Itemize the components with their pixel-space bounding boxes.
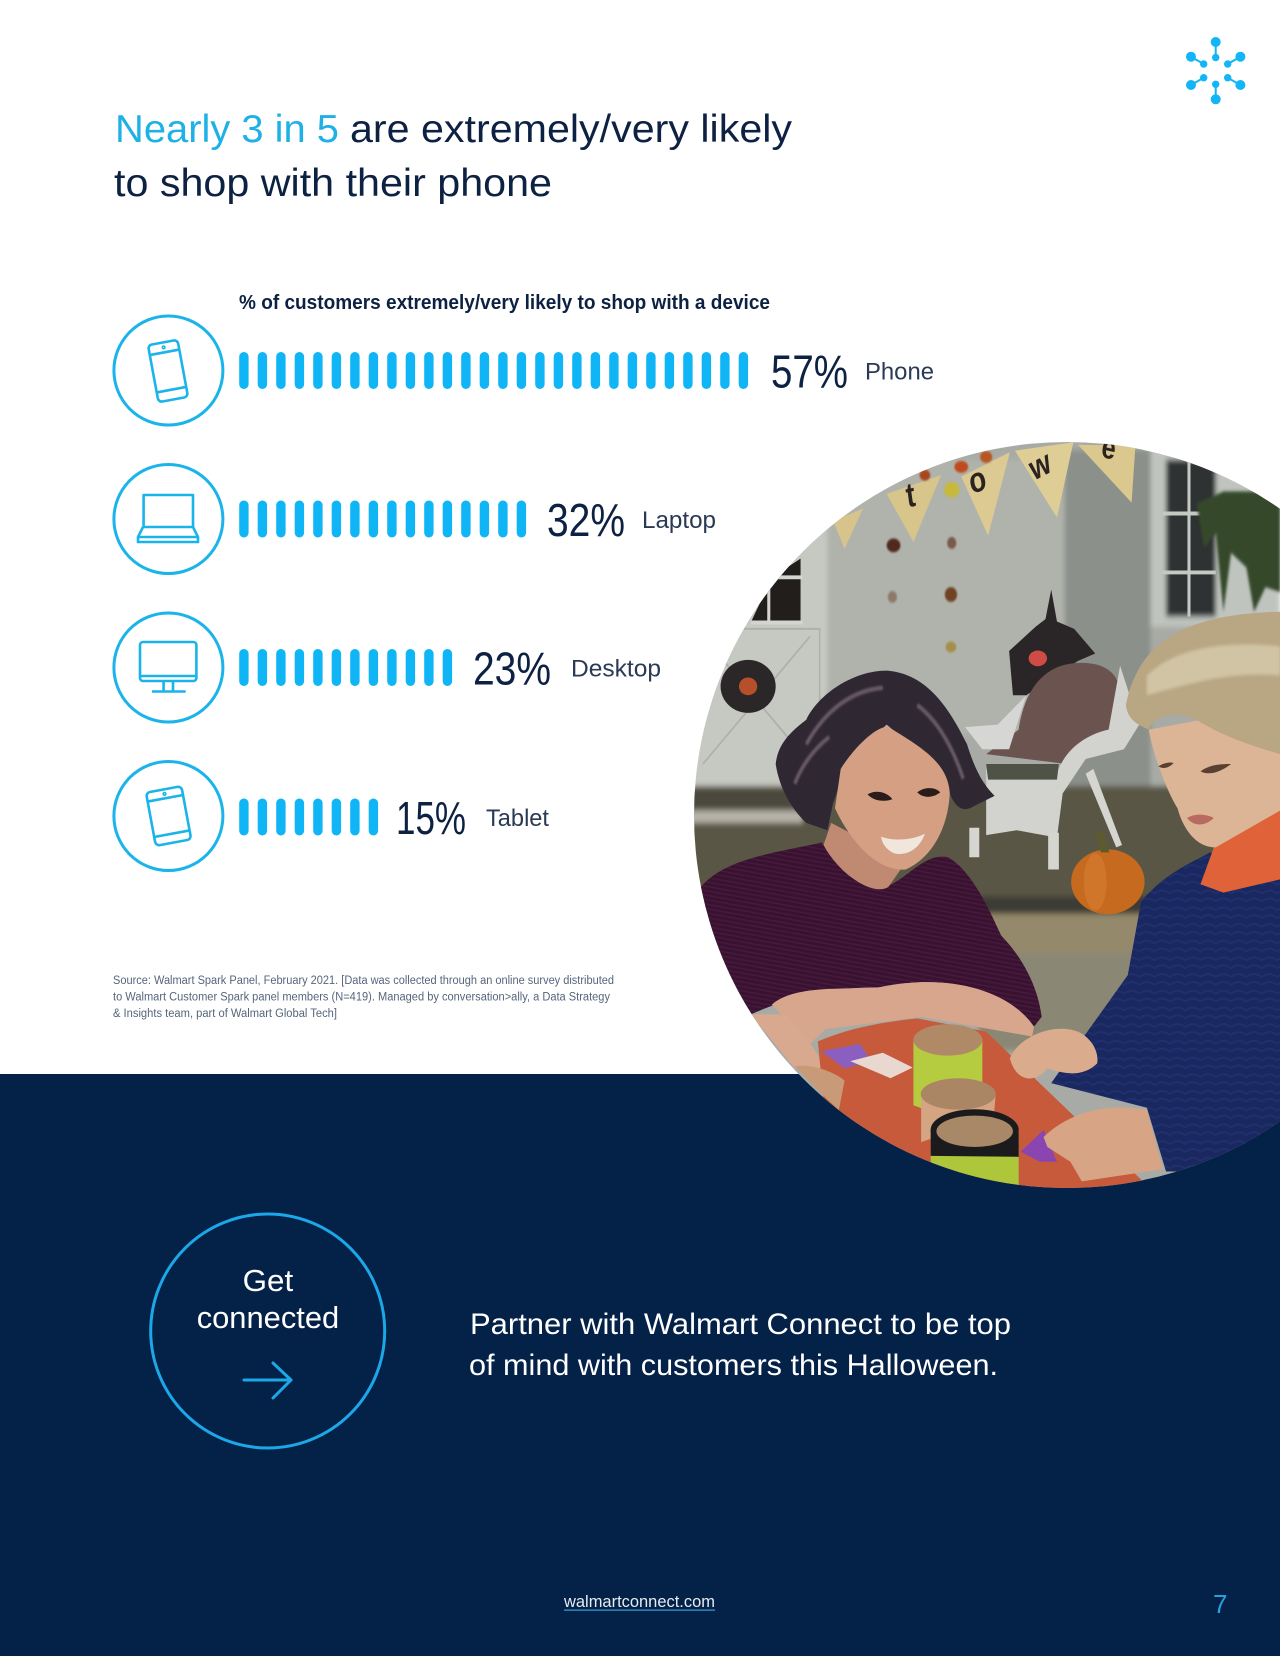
title bbox=[114, 108, 793, 205]
bunting: w bbox=[1024, 442, 1056, 489]
face bbox=[835, 727, 950, 870]
hair bbox=[776, 671, 995, 830]
door wreath bbox=[721, 660, 776, 713]
button text: connected bbox=[197, 1300, 339, 1335]
hair highlights bbox=[795, 688, 963, 784]
panel: device bar chart bbox=[114, 316, 934, 870]
title: to shop with their phone bbox=[114, 162, 552, 205]
face bbox=[1148, 720, 1280, 848]
bunting bbox=[834, 442, 1136, 548]
bar: 15% bbox=[244, 803, 373, 831]
forearm and hand bbox=[772, 982, 1034, 1044]
other hand bbox=[751, 1014, 825, 1068]
source note: Source: Walmart Spark Panel, February 2021. [Data was collected through an online survey distributed bbox=[113, 975, 614, 987]
title: are extremely/very likely bbox=[350, 108, 793, 151]
woman bbox=[701, 671, 1042, 1068]
bar: 32% bbox=[244, 505, 521, 533]
photo: mother and son doing Halloween crafts on a porch bbox=[680, 429, 1280, 1200]
right window frame bbox=[1162, 459, 1216, 617]
button text: Get bbox=[243, 1263, 294, 1298]
value: 32%: 32% bbox=[547, 494, 625, 546]
source note: to Walmart Customer Spark panel members (N=419). Managed by conversation>ally, a Data Strategy bbox=[113, 992, 610, 1004]
smile bbox=[881, 834, 925, 854]
button text bbox=[197, 1263, 339, 1335]
boy bbox=[1010, 612, 1280, 1181]
stencil sheets bbox=[822, 1044, 1057, 1162]
icon: desktop bbox=[114, 613, 223, 722]
turtleneck bbox=[1200, 808, 1280, 893]
row: desktop bbox=[114, 613, 661, 722]
icon: tablet bbox=[114, 762, 223, 870]
source note: & Insights team, part of Walmart Global Tech] bbox=[113, 1008, 337, 1020]
eyes bbox=[868, 788, 940, 801]
label: Laptop: Laptop bbox=[642, 507, 716, 534]
mouth bbox=[1187, 815, 1214, 824]
icon: Walmart Connect logo bbox=[1186, 37, 1245, 104]
hair bbox=[1126, 612, 1280, 754]
bunting: t bbox=[903, 475, 918, 515]
source note bbox=[113, 975, 614, 1020]
chart heading: % of customers extremely/very likely to shop with a device bbox=[239, 292, 770, 314]
lantern bbox=[1009, 590, 1095, 695]
page number: 7 bbox=[1213, 1589, 1227, 1619]
row: tablet bbox=[114, 762, 549, 870]
neck bbox=[824, 823, 906, 889]
lower hand bbox=[1044, 1107, 1163, 1181]
flowers bbox=[920, 451, 992, 498]
row: phone bbox=[114, 316, 934, 425]
table bbox=[818, 1018, 1143, 1200]
label: Tablet: Tablet bbox=[486, 805, 549, 832]
row: laptop bbox=[114, 464, 716, 574]
wall decorations bbox=[887, 537, 957, 652]
pumpkin bbox=[1071, 832, 1145, 914]
icon: phone bbox=[114, 316, 223, 425]
pointing hand bbox=[1010, 1029, 1097, 1078]
label: Desktop: Desktop bbox=[571, 656, 661, 682]
sweater bbox=[701, 843, 1042, 1027]
footer link: walmartconnect.com bbox=[563, 1593, 715, 1611]
sweater bbox=[1051, 852, 1280, 1172]
value: 57%: 57% bbox=[771, 346, 848, 398]
bunting: e bbox=[1099, 429, 1118, 468]
bunting: o bbox=[965, 457, 990, 502]
bar: 57% bbox=[244, 357, 743, 384]
wicker chair bbox=[965, 663, 1139, 870]
call to action text: Partner with Walmart Connect to be top bbox=[470, 1308, 1011, 1341]
paper rolls bbox=[795, 1024, 1019, 1186]
icon: laptop bbox=[114, 464, 223, 574]
hanging plant bbox=[1197, 491, 1280, 612]
call to action text: of mind with customers this Halloween. bbox=[469, 1349, 998, 1382]
value: 15%: 15% bbox=[396, 792, 466, 844]
left window bbox=[751, 559, 802, 623]
title: Nearly 3 in 5 bbox=[115, 108, 339, 151]
hair highlight bbox=[1147, 644, 1280, 695]
button ring bbox=[151, 1214, 385, 1448]
callout: Get connected button bbox=[151, 1214, 385, 1448]
bar: 23% bbox=[244, 654, 447, 681]
door panel lines bbox=[699, 629, 820, 774]
arrow bbox=[244, 1363, 291, 1398]
white page background bbox=[0, 0, 1280, 1074]
navy bottom panel bbox=[0, 1074, 1280, 1656]
call to action text bbox=[469, 1308, 1011, 1382]
eyes bbox=[1158, 763, 1231, 773]
label: Phone: Phone bbox=[865, 358, 934, 386]
value: 23%: 23% bbox=[473, 642, 551, 694]
porch background bbox=[680, 430, 1280, 1200]
